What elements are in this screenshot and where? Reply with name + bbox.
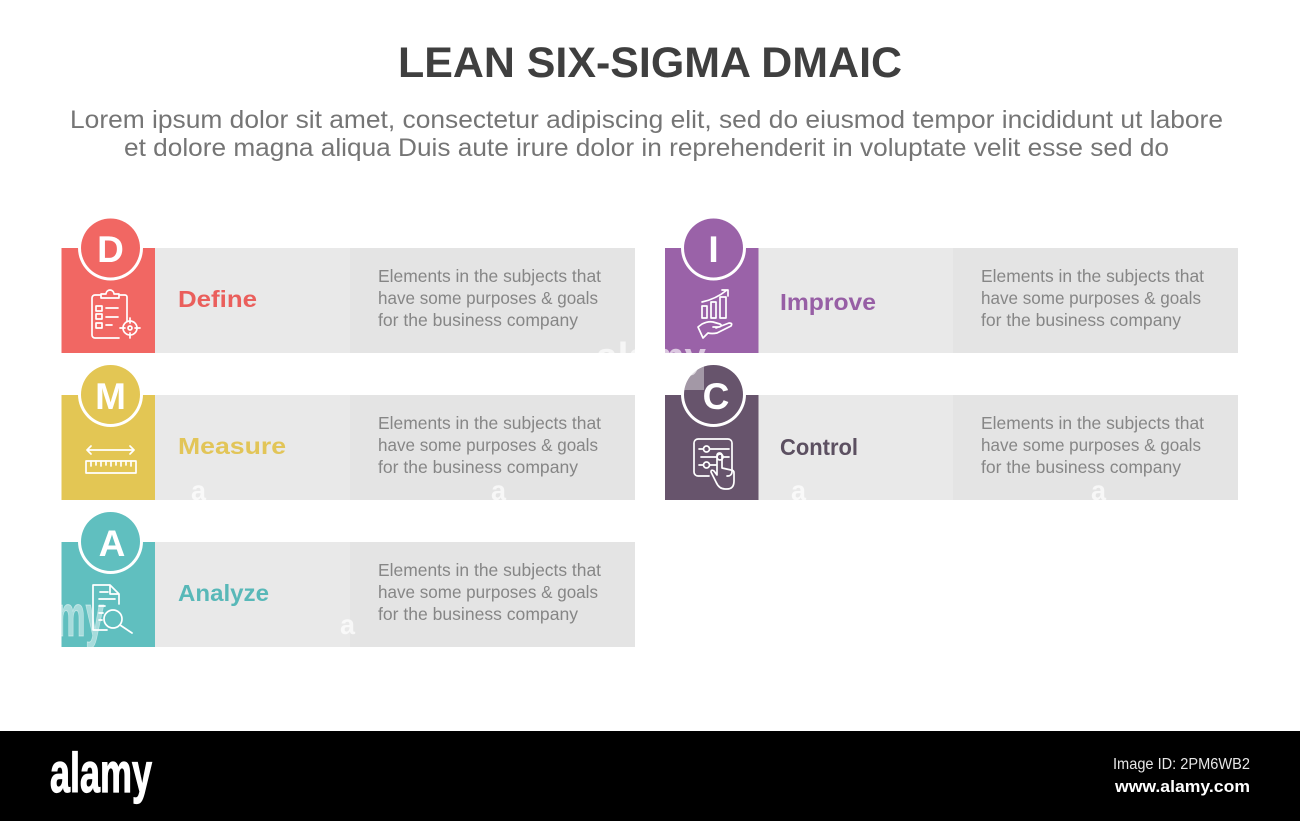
description: analyze: for the business company: [378, 604, 578, 624]
description: improve: Elements in the subjects that: [981, 266, 1204, 286]
badge: M: M: [95, 376, 126, 417]
watermark fragments: a: [340, 609, 355, 640]
icon: clipboard with target: [92, 290, 140, 338]
title: LEAN SIX-SIGMA DMAIC: [398, 39, 902, 87]
watermark fragment: my: [56, 584, 104, 649]
watermark fragments: a: [491, 475, 506, 506]
label: control: Control: [780, 434, 858, 460]
description: improve: have some purposes & goals: [981, 288, 1201, 308]
watermark fragments: a: [191, 475, 206, 506]
badge: M: [78, 362, 143, 427]
footer url: www.alamy.com: [1114, 777, 1250, 796]
badge: I: I: [708, 229, 719, 270]
description: measure: for the business company: [378, 457, 578, 477]
panel: improve: [665, 216, 1238, 353]
description: measure: [378, 413, 601, 477]
subtitle: Lorem ipsum dolor sit amet, consectetur adipiscing elit, sed do eiusmod tempor incididunt ut labore: [70, 106, 1223, 134]
description: define: have some purposes & goals: [378, 288, 598, 308]
image id: Image ID: 2PM6WB2: [1113, 756, 1250, 773]
description: analyze: [378, 560, 601, 624]
label: improve: Improve: [780, 289, 876, 315]
panel: control: [665, 362, 1238, 500]
label: define: Define: [178, 286, 257, 312]
description: control: Elements in the subjects that: [981, 413, 1204, 433]
label: analyze: Analyze: [178, 580, 269, 606]
description: control: for the business company: [981, 457, 1181, 477]
badge: A: [78, 509, 143, 574]
footer logo: alamy: [50, 741, 152, 804]
watermark fragments: a: [1091, 475, 1106, 506]
badge: D: [78, 216, 143, 280]
icon: control sliders with pointer: [694, 439, 734, 489]
icon: growth chart on hand: [698, 290, 732, 338]
badge: D: D: [97, 229, 124, 270]
badge: C: C: [703, 376, 729, 417]
description: define: for the business company: [378, 310, 578, 330]
watermark fragments: [191, 335, 1106, 640]
badge: A: A: [99, 523, 125, 564]
description: measure: Elements in the subjects that: [378, 413, 601, 433]
subtitle: et dolore magna aliqua Duis aute irure dolor in reprehenderit in voluptate velit esse sed do: [124, 134, 1169, 162]
description: analyze: have some purposes & goals: [378, 582, 598, 602]
icon: document with magnifier: [93, 585, 132, 633]
description: define: [378, 266, 601, 330]
description: improve: for the business company: [981, 310, 1181, 330]
panel: measure: [62, 362, 635, 500]
description: define: Elements in the subjects that: [378, 266, 601, 286]
badge: I: [681, 216, 746, 280]
watermark fragments: alamy: [596, 335, 706, 376]
label: measure: Measure: [178, 433, 286, 459]
watermark fragments: a: [791, 475, 806, 506]
description: measure: have some purposes & goals: [378, 435, 598, 455]
description: improve: [981, 266, 1204, 330]
subtitle: [70, 106, 1223, 162]
description: control: [981, 413, 1204, 477]
icon: ruler: [86, 446, 136, 473]
badge: C: [681, 362, 746, 427]
description: analyze: Elements in the subjects that: [378, 560, 601, 580]
panel: define: [62, 216, 635, 353]
footer bar: [0, 731, 1300, 821]
panel: analyze: [56, 509, 635, 649]
description: control: have some purposes & goals: [981, 435, 1201, 455]
